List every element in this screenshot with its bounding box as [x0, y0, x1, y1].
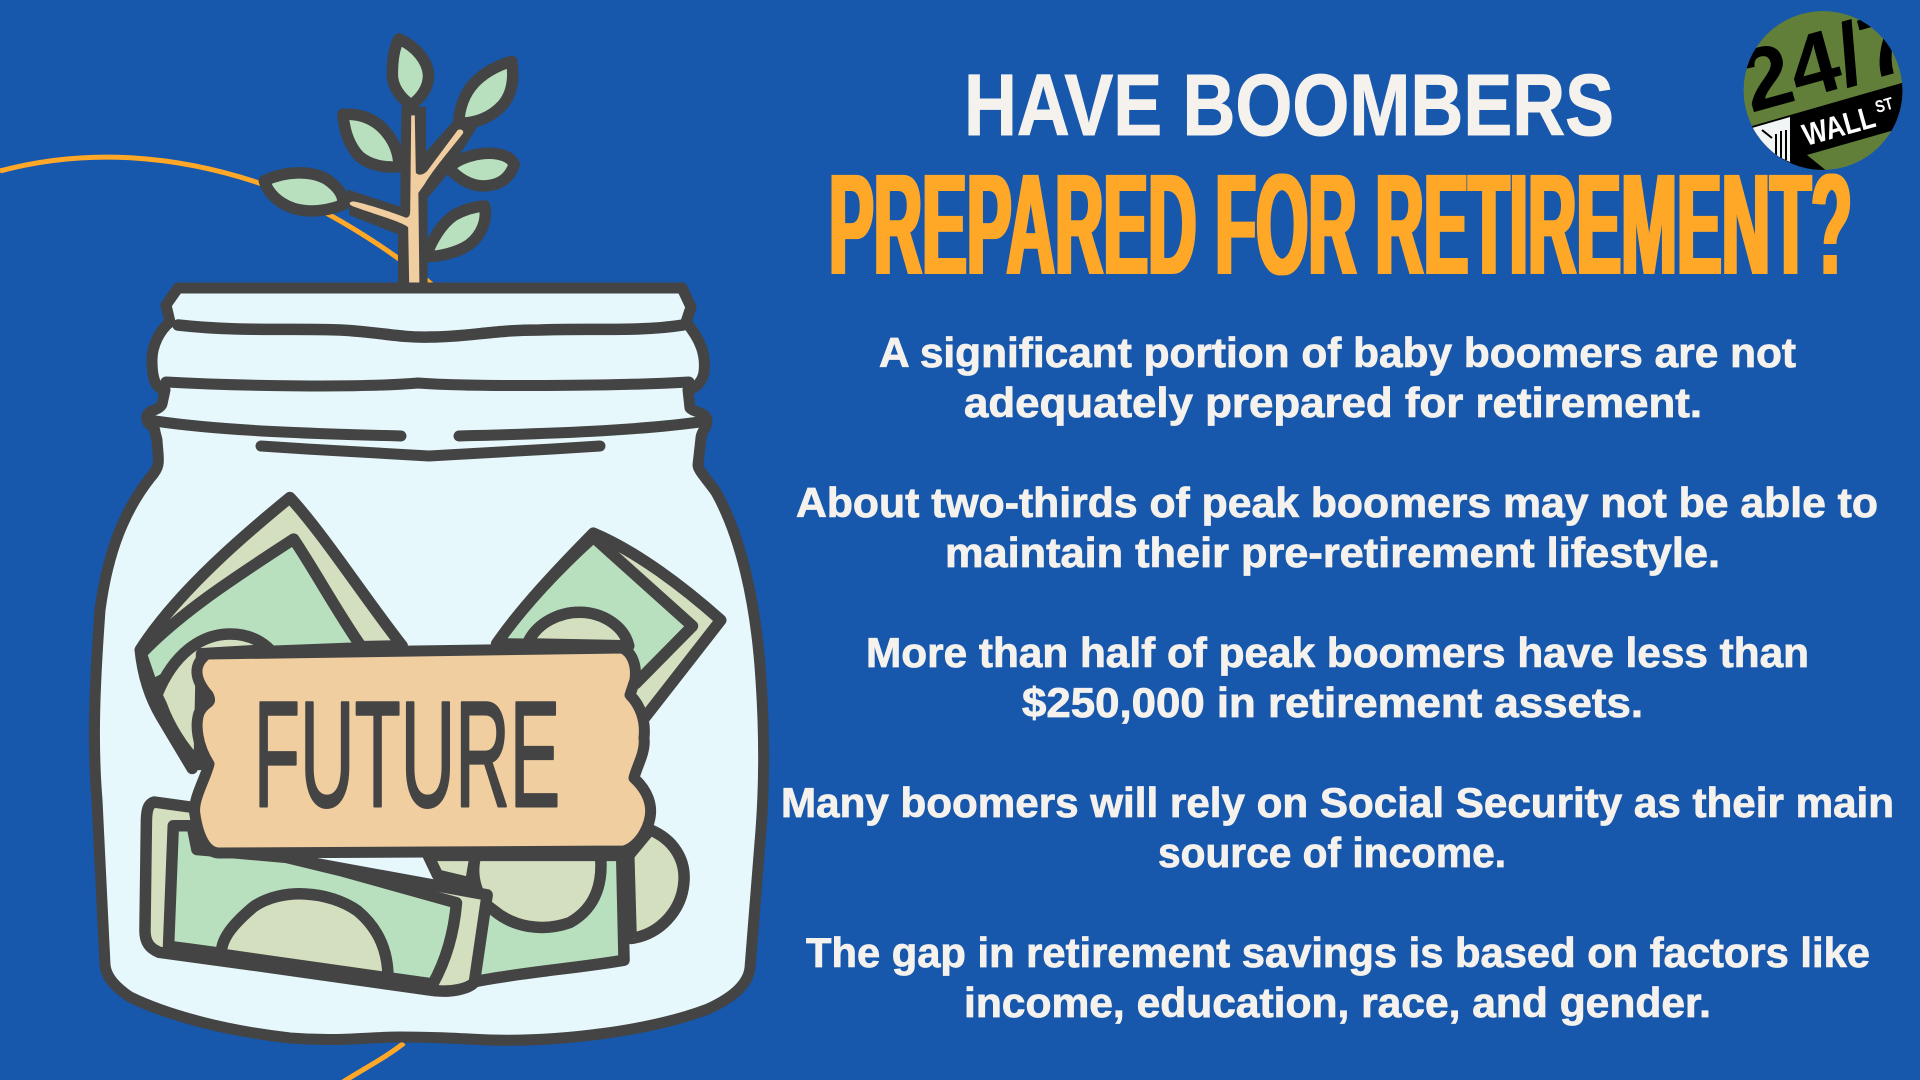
bill: lower left front — [169, 826, 456, 984]
leaf: left middle — [343, 114, 399, 167]
text: point 5: The gap in retirement savings is based on factors like — [806, 929, 1870, 976]
text: point 1: adequately prepared for retirement. — [964, 379, 1702, 426]
bill: lower left back — [145, 802, 487, 991]
text: point 5 — [806, 929, 1870, 1026]
logo disc — [1744, 11, 1902, 170]
logo ST: ST — [1873, 94, 1896, 117]
jar rim lines — [155, 325, 707, 456]
text: point 1: A significant portion of baby boomers are not — [879, 329, 1796, 376]
leaf: lower right — [426, 206, 485, 257]
text: point 3: $250,000 in retirement assets. — [1022, 679, 1643, 726]
text: point 4 — [781, 779, 1894, 876]
icon: glass jar — [94, 288, 764, 1040]
logo columns — [1762, 130, 1786, 160]
bill: lower right — [471, 855, 624, 982]
text: point 2: maintain their pre-retirement lifestyle. — [945, 529, 1720, 576]
text: point 1 — [879, 329, 1796, 426]
logo street sign band — [1745, 82, 1905, 172]
text: point 3 — [866, 629, 1809, 726]
bill: upper right front — [497, 537, 692, 683]
text: point 4: source of income. — [1158, 829, 1506, 876]
leaf: top — [392, 39, 429, 105]
leaf: far left — [264, 173, 343, 211]
stem fill — [350, 115, 463, 284]
leaf: right middle — [449, 153, 514, 186]
tag word: FUTURE — [254, 672, 560, 839]
tag shape — [195, 648, 651, 853]
logo WALL: WALL — [1799, 99, 1879, 153]
coin: centre — [474, 855, 601, 927]
coin: upper right — [527, 612, 629, 646]
jar body — [94, 288, 764, 1040]
label: FUTURE tag — [195, 648, 651, 853]
bill: behind centre — [428, 855, 475, 883]
text: point 3: More than half of peak boomers have less than — [866, 629, 1809, 676]
coin: right — [629, 830, 684, 938]
leaf: upper right — [459, 61, 513, 123]
text: point 2: About two-thirds of peak boomers may not be able to — [796, 479, 1878, 526]
logo: 24/7 Wall St — [1744, 11, 1902, 170]
text: point 5: income, education, race, and gender. — [964, 979, 1711, 1026]
bill: upper left front — [141, 539, 362, 685]
title line 1: HAVE BOOMBERS — [964, 57, 1614, 154]
stem outline — [347, 107, 477, 286]
bill: upper right back — [497, 533, 721, 717]
coin: lower left — [221, 894, 388, 978]
coin: upper left — [157, 634, 270, 764]
icon: plant sprout — [264, 39, 514, 286]
text: point 2 — [796, 479, 1878, 576]
bill: upper left back — [140, 498, 402, 768]
icon: banknotes and coins inside jar — [140, 498, 721, 991]
text: point 4: Many boomers will rely on Social Security as their main — [781, 779, 1894, 826]
orange curve behind jar — [0, 157, 436, 1080]
logo building — [1752, 117, 1790, 162]
